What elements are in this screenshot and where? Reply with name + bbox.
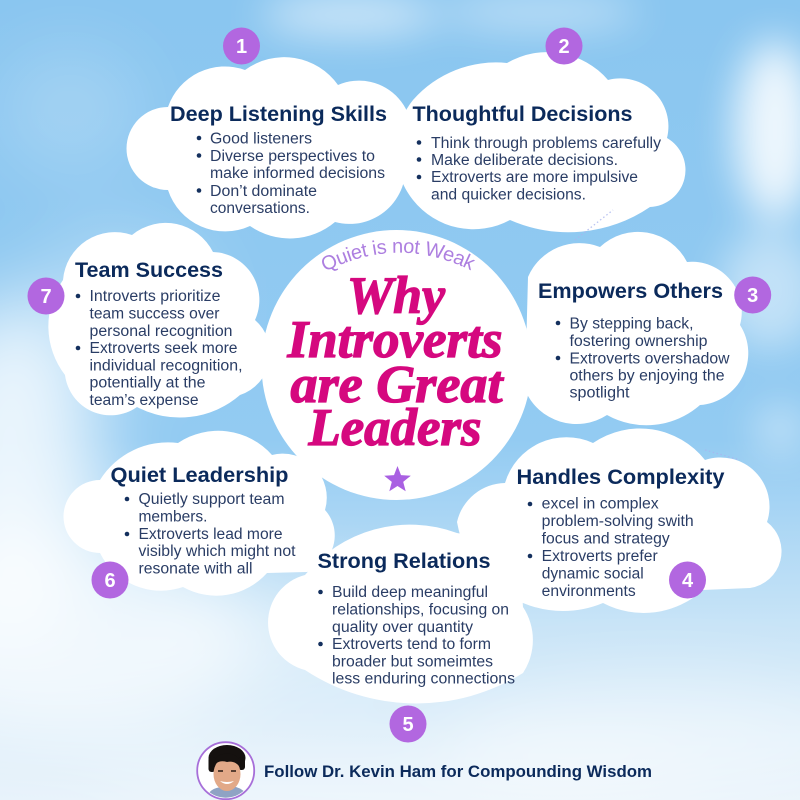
- section 1: Deep Listening Skills: Diverse perspectives to: [210, 148, 375, 165]
- section 5: Strong Relations: less enduring connections: [332, 670, 515, 688]
- cloud 6: [64, 431, 335, 596]
- section 1: Deep Listening Skills: make informed decisions: [210, 165, 385, 182]
- section 2: Thoughtful Decisions: Thoughtful Decisions: [412, 103, 632, 126]
- section 1: Deep Listening Skills: 1: [236, 36, 247, 58]
- section 3: Empowers Others: spotlight: [570, 384, 630, 402]
- section 3: Empowers Others: Empowers Others: [538, 280, 723, 303]
- section 1: Deep Listening Skills: Good listeners: [210, 130, 312, 148]
- section 3: Empowers Others: others by enjoying the: [570, 368, 724, 384]
- main title: [286, 267, 505, 457]
- section 5: Strong Relations: Extroverts tend to form: [332, 636, 491, 653]
- section 7: Team Success: 7: [40, 286, 52, 308]
- section 3: Empowers Others: By stepping back,: [570, 316, 694, 332]
- section 2: Thoughtful Decisions: and quicker decisions.: [431, 186, 586, 204]
- section 5: Strong Relations: Build deep meaningful: [332, 584, 488, 601]
- section 2: Thoughtful Decisions: [412, 28, 661, 204]
- main title: Introverts: [286, 311, 502, 369]
- section 2: Thoughtful Decisions: Think through problems carefully: [431, 135, 661, 152]
- section 4: Handles Complexity: dynamic social: [542, 566, 644, 582]
- center circle: [262, 230, 532, 500]
- main title: Leaders: [308, 399, 482, 457]
- section 5: Strong Relations: Strong Relations: [318, 550, 490, 573]
- section 3: Empowers Others: 3: [747, 285, 758, 307]
- section 4: Handles Complexity: problem-solving swith: [542, 513, 694, 530]
- section 3: Empowers Others: [538, 276, 771, 402]
- icon: purple star: [384, 466, 411, 491]
- section 6: Quiet Leadership: members.: [138, 508, 208, 526]
- section 7: Team Success: [28, 259, 242, 409]
- section 7: Team Success: team’s expense: [90, 392, 198, 409]
- section 7: Team Success: Extroverts seek more: [90, 340, 238, 357]
- section 4: Handles Complexity: focus and strategy: [542, 530, 670, 548]
- section 5: Strong Relations: relationships, focusing on: [332, 602, 509, 618]
- cloud 3: [525, 232, 748, 425]
- section 4: Handles Complexity: [516, 466, 725, 600]
- section 1: Deep Listening Skills: [170, 28, 387, 217]
- footer: author portrait: [197, 742, 254, 800]
- section 4: Handles Complexity: 4: [682, 570, 694, 592]
- tagline: Quiet is not Weak: Quiet is not Weak: [322, 240, 475, 271]
- section 7: Team Success: personal recognition: [90, 323, 232, 340]
- main title: are Great: [290, 356, 505, 414]
- section 3: Empowers Others: Extroverts overshadow: [570, 350, 730, 368]
- section 6: Quiet Leadership: Quietly support team: [138, 491, 284, 508]
- section 7: Team Success: potentially at the: [90, 374, 206, 392]
- section 6: Quiet Leadership: Quiet Leadership: [110, 464, 288, 487]
- section 6: Quiet Leadership: visibly which might not: [138, 543, 296, 560]
- section 5: Strong Relations: quality over quantity: [332, 619, 473, 636]
- cloud 1: [127, 57, 412, 238]
- section 3: Empowers Others: fostering ownership: [570, 333, 708, 350]
- section 7: Team Success: team success over: [90, 306, 220, 322]
- section 2: Thoughtful Decisions: 2: [558, 36, 570, 58]
- section 7: Team Success: Team Success: [75, 259, 223, 282]
- section 4: Handles Complexity: Handles Complexity: [516, 466, 725, 489]
- cloud 2: [395, 52, 685, 232]
- main title: Why: [347, 267, 445, 325]
- cloud 4: [457, 428, 782, 613]
- section 5: Strong Relations: broader but someimtes: [332, 654, 493, 670]
- cloud 7: [48, 223, 270, 418]
- section 2: Thoughtful Decisions: Make deliberate decisions.: [431, 152, 618, 169]
- section 6: Quiet Leadership: 6: [104, 570, 116, 592]
- section 4: Handles Complexity: excel in complex: [542, 496, 659, 512]
- section 6: Quiet Leadership: [92, 464, 296, 598]
- cloud 5: [268, 525, 533, 703]
- section 4: Handles Complexity: Extroverts prefer: [542, 548, 658, 565]
- section 1: Deep Listening Skills: conversations.: [210, 200, 310, 217]
- section 5: Strong Relations: [318, 550, 515, 742]
- section 1: Deep Listening Skills: Deep Listening Skills: [170, 103, 387, 126]
- section 6: Quiet Leadership: resonate with all: [138, 560, 252, 578]
- footer text: Follow Dr. Kevin Ham for Compounding Wisdom: [264, 763, 652, 781]
- section 7: Team Success: Introverts prioritize: [90, 288, 220, 305]
- section 2: Thoughtful Decisions: Extroverts are more impulsive: [431, 169, 638, 186]
- section 5: Strong Relations: 5: [402, 714, 414, 736]
- section 6: Quiet Leadership: Extroverts lead more: [138, 526, 282, 543]
- section 4: Handles Complexity: environments: [542, 583, 636, 600]
- section 1: Deep Listening Skills: Don’t dominate: [210, 183, 317, 200]
- section 7: Team Success: individual recognition,: [90, 358, 242, 374]
